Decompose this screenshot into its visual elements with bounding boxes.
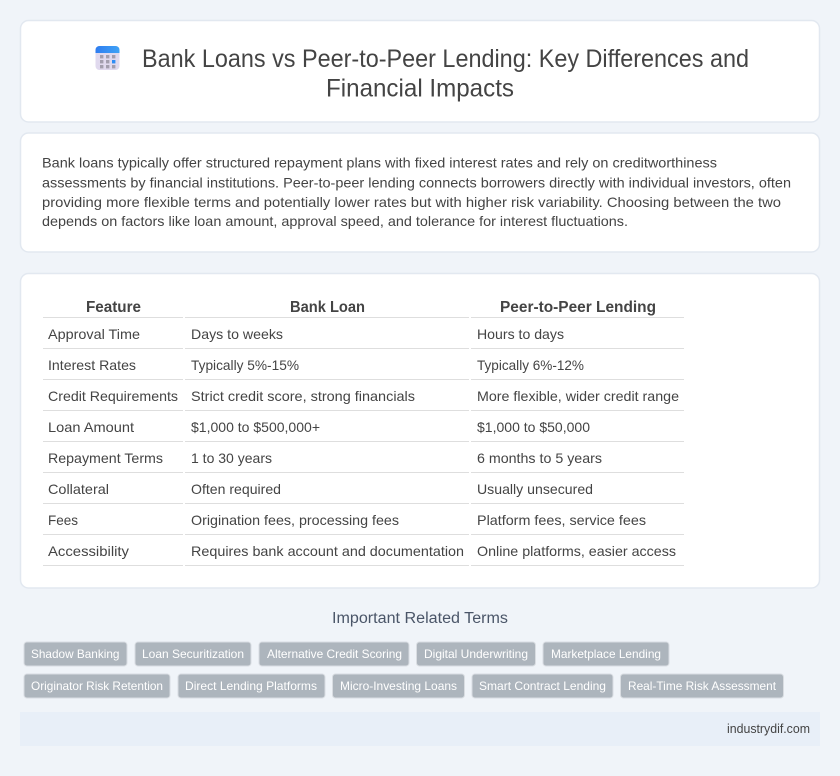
title — [142, 45, 749, 102]
table header — [86, 299, 656, 316]
tag — [620, 674, 784, 698]
table header: Bank Loan — [290, 299, 365, 316]
row: accessibility: Online platforms, easier access — [477, 543, 676, 559]
row: accessibility: Accessibility — [48, 543, 129, 559]
row: accessibility — [48, 543, 676, 559]
row: repayment terms: 6 months to 5 years — [477, 450, 602, 466]
row: approval time: Days to weeks — [191, 326, 283, 342]
row: fees: Fees — [48, 512, 78, 528]
heading: related terms: Important Related Terms — [332, 610, 508, 627]
title: Bank Loans vs Peer-to-Peer Lending: Key Differences and — [142, 45, 749, 73]
footer: industrydif.com — [727, 722, 810, 736]
row: approval time: Hours to days — [477, 326, 564, 342]
text block: introduction: assessments by financial institutions. Peer-to-peer lending connects borrowers directly with individual investors, often — [42, 174, 791, 190]
tag: Real-Time Risk Assessment — [628, 679, 777, 693]
title: Financial Impacts — [326, 74, 514, 102]
icon: calendar — [96, 46, 120, 70]
row: repayment terms: 1 to 30 years — [191, 450, 272, 466]
row: repayment terms — [48, 450, 602, 466]
tag — [24, 674, 170, 698]
tag: Micro-Investing Loans — [340, 679, 457, 693]
row: credit requirements: More flexible, wider credit range — [477, 388, 679, 404]
row: collateral: Collateral — [48, 481, 109, 497]
tag — [472, 674, 613, 698]
tag: Shadow Banking — [31, 647, 120, 661]
row: credit requirements: Credit Requirements — [48, 388, 178, 404]
tag — [332, 674, 464, 698]
panel: introduction — [20, 133, 820, 252]
tag: Alternative Credit Scoring — [267, 647, 402, 661]
row: approval time: Approval Time — [48, 326, 140, 342]
row: credit requirements: Strict credit score, strong financials — [191, 388, 415, 404]
row: accessibility: Requires bank account and documentation — [191, 543, 464, 559]
tag — [543, 642, 669, 666]
text block: introduction — [42, 154, 791, 229]
row: fees: Origination fees, processing fees — [191, 512, 399, 528]
tag: Loan Securitization — [142, 647, 244, 661]
row: collateral — [48, 481, 593, 497]
row: loan amount: Loan Amount — [48, 419, 134, 435]
row: interest rates: Interest Rates — [48, 357, 136, 373]
row: collateral: Usually unsecured — [477, 481, 593, 497]
tag — [178, 674, 325, 698]
row: approval time — [48, 326, 564, 342]
row: fees: Platform fees, service fees — [477, 512, 646, 528]
row: repayment terms: Repayment Terms — [48, 450, 163, 466]
text block: introduction: providing more flexible terms and potentially lower rates but with higher risk variability. Choosing between the two — [42, 194, 781, 210]
text block: introduction: depends on factors like loan amount, approval speed, and tolerance for interest fluctuations. — [42, 213, 628, 229]
tags: related terms — [24, 642, 784, 698]
tag: Marketplace Lending — [551, 647, 661, 661]
row: interest rates: Typically 5%-15% — [191, 357, 299, 373]
panel: comparison table — [20, 274, 820, 588]
tag — [24, 642, 127, 666]
table header: Peer-to-Peer Lending — [500, 299, 656, 316]
row: loan amount: $1,000 to $500,000+ — [191, 419, 320, 435]
tag: Originator Risk Retention — [31, 679, 163, 693]
tag: Direct Lending Platforms — [185, 679, 317, 693]
row: fees — [48, 512, 646, 528]
row: credit requirements — [48, 388, 679, 404]
tag — [416, 642, 536, 666]
panel: header — [20, 20, 820, 122]
row: collateral: Often required — [191, 481, 281, 497]
row: loan amount: $1,000 to $50,000 — [477, 419, 590, 435]
text block: introduction: Bank loans typically offer structured repayment plans with fixed interest rates and rely on creditworthiness — [42, 154, 717, 170]
table header: Feature — [86, 299, 141, 316]
tag: Smart Contract Lending — [479, 679, 606, 693]
row: interest rates: Typically 6%-12% — [477, 357, 584, 373]
row: loan amount — [48, 419, 590, 435]
tag: Digital Underwriting — [424, 647, 528, 661]
footer — [20, 712, 820, 746]
tag — [259, 642, 409, 666]
tag — [135, 642, 251, 666]
row: interest rates — [48, 357, 584, 373]
